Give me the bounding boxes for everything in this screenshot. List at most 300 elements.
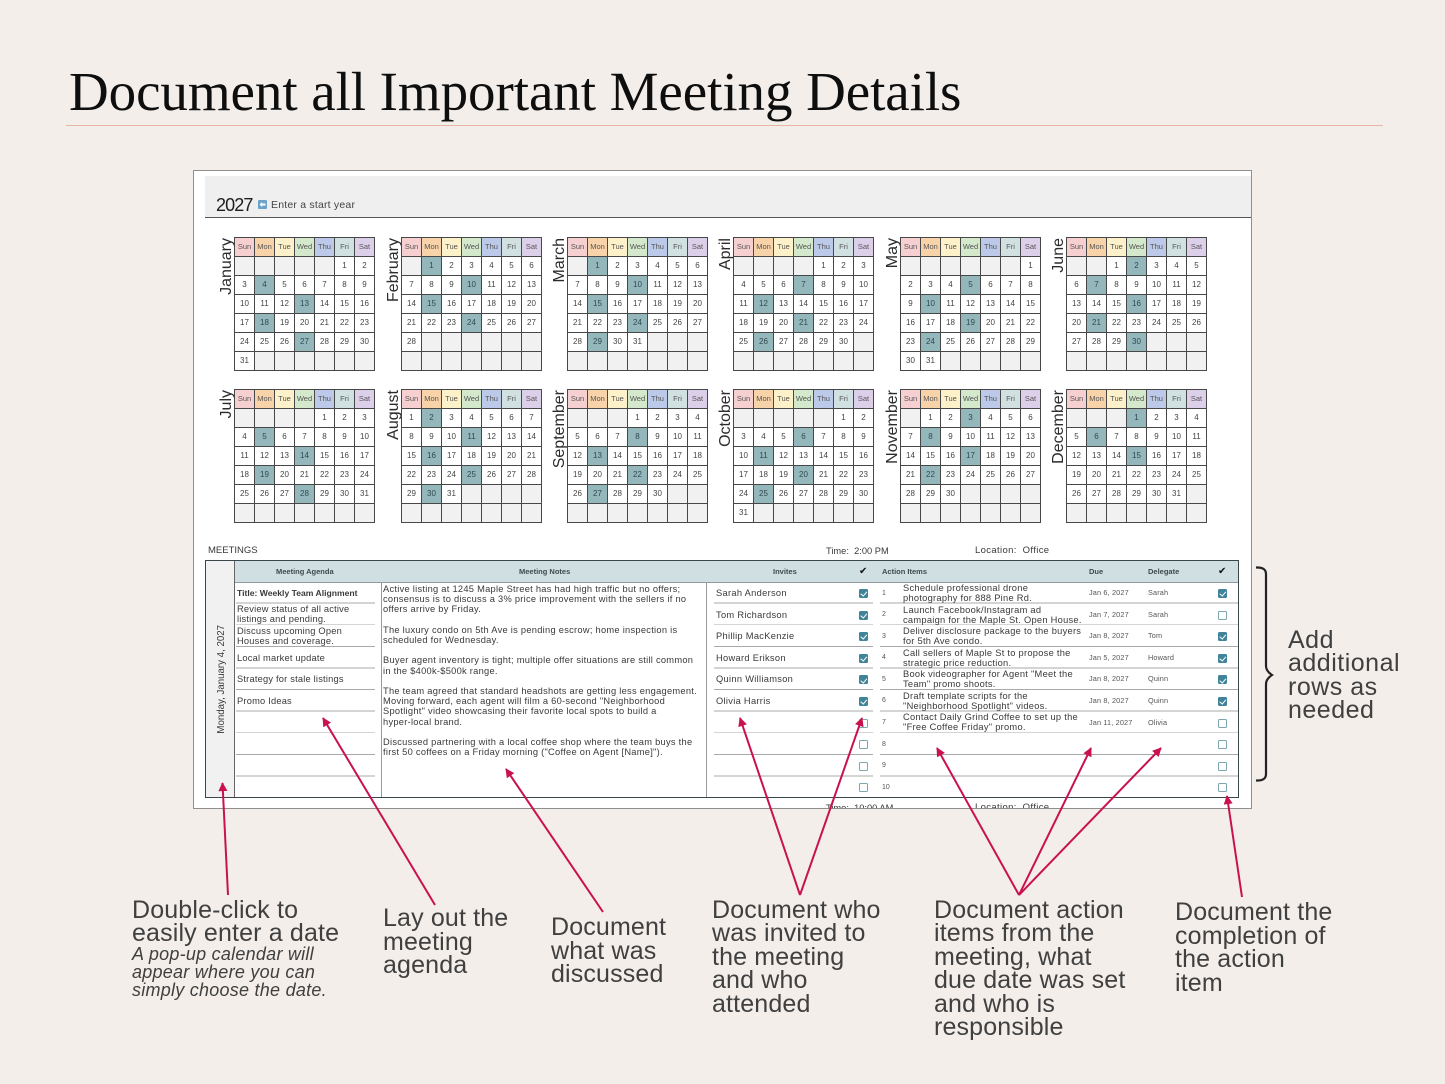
day grid: 16: [946, 451, 955, 460]
arrow: agenda: [323, 718, 435, 905]
day grid: [234, 389, 375, 523]
day grid: [900, 237, 1041, 371]
day grid: 16: [839, 299, 848, 308]
day grid: Wed: [297, 242, 312, 251]
day grid: 16: [1152, 451, 1161, 460]
day grid: 13: [593, 451, 602, 460]
day grid: 14: [573, 299, 582, 308]
day grid: Sat: [1025, 242, 1036, 251]
day grid: 1: [841, 413, 846, 422]
day grid: 31: [739, 508, 748, 517]
due dates: Jan 11, 2027: [1089, 718, 1132, 727]
day grid: 17: [926, 318, 935, 327]
day grid: 14: [1112, 451, 1121, 460]
day grid: Thu: [984, 242, 997, 251]
day grid: 11: [653, 280, 662, 289]
day grid: 23: [1152, 470, 1161, 479]
day grid: Sat: [359, 242, 370, 251]
day grid: 11: [467, 432, 476, 441]
day grid: 7: [821, 432, 826, 441]
day grid: 9: [449, 280, 454, 289]
day grid: 17: [1152, 299, 1161, 308]
day grid: 4: [242, 432, 247, 441]
day grid: 20: [593, 470, 602, 479]
day grid: 6: [595, 432, 600, 441]
day grid: Tue: [611, 394, 624, 403]
day grid: 27: [527, 318, 536, 327]
day grid: 28: [799, 337, 808, 346]
day grid: Sat: [692, 242, 703, 251]
day grid: 2: [948, 413, 953, 422]
action item 1: [903, 583, 1032, 603]
day grid: Wed: [1129, 242, 1144, 251]
day grid: 23: [360, 318, 369, 327]
day grid: 17: [859, 299, 868, 308]
month label: June: [1050, 238, 1066, 273]
day grid: 24: [926, 337, 935, 346]
day grid: 5: [262, 432, 267, 441]
day grid: 12: [966, 299, 975, 308]
brace: additional rows: [1256, 567, 1272, 781]
day grid: Tue: [944, 242, 957, 251]
day grid: 9: [1154, 432, 1159, 441]
day grid: Thu: [1150, 394, 1163, 403]
callout: completion: item: [1175, 969, 1223, 997]
callout: action items: due date was set: [934, 966, 1125, 994]
action checkboxes: [1218, 589, 1227, 792]
day grid: 24: [1172, 470, 1181, 479]
day grid: 6: [302, 280, 307, 289]
meeting notes: scheduled for Wednesday.: [383, 635, 499, 645]
header: invites check: ✔: [859, 566, 867, 576]
day grid: 18: [693, 451, 702, 460]
action item numbers: 8: [882, 741, 886, 748]
date column: [206, 561, 235, 797]
day grid: 16: [613, 299, 622, 308]
day grid: 30: [427, 489, 436, 498]
day grid: 26: [779, 489, 788, 498]
day grid: [401, 237, 542, 371]
day grid: 9: [429, 432, 434, 441]
day grid: 7: [575, 280, 580, 289]
action item numbers: 10: [882, 784, 890, 791]
day grid: 10: [926, 299, 935, 308]
meeting notes: offers arrive by Friday.: [383, 604, 481, 614]
day grid: 28: [573, 337, 582, 346]
day grid: 1: [1028, 261, 1033, 270]
day grid: 13: [1072, 299, 1081, 308]
day grid: 22: [407, 470, 416, 479]
day grid: 2: [429, 413, 434, 422]
day grid: 29: [633, 489, 642, 498]
action item 7: [903, 712, 1078, 732]
day grid: 31: [1172, 489, 1181, 498]
day grid: 13: [1092, 451, 1101, 460]
day grid: 3: [469, 261, 474, 270]
day grid: Wed: [796, 394, 811, 403]
day grid: 19: [280, 318, 289, 327]
day grid: 15: [633, 451, 642, 460]
day grid: 5: [781, 432, 786, 441]
day grid: 12: [673, 280, 682, 289]
day grid: Sun: [238, 394, 251, 403]
day grid: 20: [300, 318, 309, 327]
day grid: Thu: [318, 394, 331, 403]
due dates: Jan 6, 2027: [1089, 588, 1129, 597]
day grid: 26: [280, 337, 289, 346]
day grid: 8: [635, 432, 640, 441]
invite names: Sarah Anderson: [716, 588, 787, 598]
day grid: 16: [653, 451, 662, 460]
action item numbers: 5: [882, 676, 886, 683]
day grid: 28: [1092, 337, 1101, 346]
day grid: 26: [673, 318, 682, 327]
day grid: 4: [655, 261, 660, 270]
due dates: Jan 5, 2027: [1089, 653, 1129, 662]
day grid: 15: [427, 299, 436, 308]
day grid: 18: [260, 318, 269, 327]
day grid: [1066, 237, 1207, 371]
calendar: June: [1050, 237, 1207, 371]
day grid: 23: [653, 470, 662, 479]
agenda items: listings and pending.: [237, 614, 326, 624]
action item 6: [903, 691, 1047, 711]
callout: invites: Document who: [712, 896, 881, 924]
day grid: 2: [861, 413, 866, 422]
day grid: 18: [653, 299, 662, 308]
calendar: September: [550, 389, 708, 523]
day grid: Wed: [297, 394, 312, 403]
callout: invites: the meeting: [712, 943, 844, 971]
day grid: 13: [300, 299, 309, 308]
meeting table: [205, 560, 1239, 798]
day grid: 30: [839, 337, 848, 346]
action item 4: [903, 648, 1071, 668]
meeting location: Location: Office: [975, 545, 1049, 556]
day grid: 5: [1194, 261, 1199, 270]
day grid: 12: [507, 280, 516, 289]
day grid: 22: [819, 318, 828, 327]
callout: additional rows: additional: [1288, 649, 1400, 677]
day grid: 8: [595, 280, 600, 289]
day grid: 29: [340, 337, 349, 346]
day grid: [567, 389, 708, 523]
day grid: 10: [467, 280, 476, 289]
day grid: 6: [1094, 432, 1099, 441]
day grid: 23: [859, 470, 868, 479]
day grid: 8: [928, 432, 933, 441]
month label: July: [218, 390, 234, 418]
day grid: 25: [693, 470, 702, 479]
day grid: 17: [633, 299, 642, 308]
day grid: 8: [1028, 280, 1033, 289]
day grid: 10: [859, 280, 868, 289]
month label: August: [384, 390, 402, 440]
callout: agenda: Lay out the: [383, 904, 508, 932]
day grid: Fri: [1006, 242, 1015, 251]
day grid: 8: [342, 280, 347, 289]
day grid: 10: [1172, 432, 1181, 441]
day grid: 30: [360, 337, 369, 346]
title underline: [66, 125, 1383, 126]
arrow: notes: [506, 769, 603, 912]
day grid: 15: [1112, 299, 1121, 308]
header: Invites: Invites: [773, 567, 797, 576]
invite names: Olivia Harris: [716, 696, 771, 706]
day grid: 16: [360, 299, 369, 308]
day grid: 1: [429, 261, 434, 270]
action item numbers: 3: [882, 633, 886, 640]
header: Due: Due: [1089, 567, 1103, 576]
day grid: 29: [839, 489, 848, 498]
day grid: Thu: [318, 242, 331, 251]
day grid: 5: [1074, 432, 1079, 441]
day grid: 1: [821, 261, 826, 270]
day grid: Tue: [944, 394, 957, 403]
day grid: 21: [1112, 470, 1121, 479]
day grid: 5: [509, 261, 514, 270]
day grid: 25: [759, 489, 768, 498]
day grid: 12: [487, 432, 496, 441]
day grid: Mon: [424, 242, 439, 251]
day grid: 26: [507, 318, 516, 327]
day grid: 12: [573, 451, 582, 460]
day grid: Fri: [1006, 394, 1015, 403]
day grid: 9: [948, 432, 953, 441]
day grid: 22: [839, 470, 848, 479]
day grid: 25: [986, 470, 995, 479]
day grid: 19: [779, 470, 788, 479]
day grid: 12: [779, 451, 788, 460]
day grid: 22: [1026, 318, 1035, 327]
day grid: 29: [407, 489, 416, 498]
day grid: 24: [673, 470, 682, 479]
agenda item: Strategy for stale listings: [237, 674, 344, 684]
day grid: 27: [1092, 489, 1101, 498]
day grid: 7: [409, 280, 414, 289]
day grid: 18: [467, 451, 476, 460]
day grid: 16: [340, 451, 349, 460]
day grid: Sat: [858, 242, 869, 251]
day grid: 27: [1072, 337, 1081, 346]
action item 2: campaign for the Maple St. Open House.: [903, 615, 1082, 625]
arrow: date column: [222, 783, 228, 895]
day grid: 11: [487, 280, 496, 289]
header: Meeting Notes: Meeting Notes: [519, 567, 570, 576]
day grid: 12: [1192, 280, 1201, 289]
day grid: 9: [615, 280, 620, 289]
day grid: Mon: [590, 394, 605, 403]
day grid: 20: [799, 470, 808, 479]
day grid: Thu: [651, 394, 664, 403]
day grid: Sun: [405, 242, 418, 251]
day grid: 19: [1072, 470, 1081, 479]
meetings heading: MEETINGS: [208, 545, 258, 556]
day grid: 4: [761, 432, 766, 441]
day grid: Thu: [651, 242, 664, 251]
day grid: Sat: [526, 242, 537, 251]
day grid: 3: [675, 413, 680, 422]
action item 2: Launch Facebook/Instagram ad: [903, 604, 1041, 614]
day grid: 1: [1114, 261, 1119, 270]
day grid: 6: [695, 261, 700, 270]
day grid: 31: [360, 489, 369, 498]
day grid: Mon: [257, 242, 272, 251]
day grid: 5: [575, 432, 580, 441]
day grid: 15: [407, 451, 416, 460]
day grid: 2: [615, 261, 620, 270]
invite names: Howard Erikson: [716, 653, 786, 663]
year value: 2027: [216, 195, 252, 215]
day grid: Tue: [777, 394, 790, 403]
callout: completion: completion of: [1175, 922, 1326, 950]
day grid: 21: [320, 318, 329, 327]
day grid: 7: [529, 413, 534, 422]
day grid: 20: [986, 318, 995, 327]
day grid: Thu: [984, 394, 997, 403]
action item 4: Call sellers of Maple St to propose the: [903, 648, 1071, 658]
day grid: Tue: [278, 394, 291, 403]
day grid: Wed: [630, 242, 645, 251]
day grid: [1066, 389, 1207, 523]
day grid: 15: [839, 451, 848, 460]
callout: notes: discussed: [551, 960, 664, 988]
day grid: Sun: [904, 394, 917, 403]
day grid: Tue: [1110, 242, 1123, 251]
day grid: 18: [240, 470, 249, 479]
day grid: 11: [759, 451, 768, 460]
callout: date sub-note: appear where you can: [132, 962, 315, 982]
day grid: 20: [1092, 470, 1101, 479]
day grid: 4: [262, 280, 267, 289]
calendar: November: [884, 389, 1041, 523]
day grid: 3: [362, 413, 367, 422]
day grid: 31: [447, 489, 456, 498]
day grid: 28: [1006, 337, 1015, 346]
day grid: 27: [593, 489, 602, 498]
day grid: 22: [1132, 470, 1141, 479]
callout: invites: and who: [712, 966, 808, 994]
day grid: 15: [1132, 451, 1141, 460]
day grid: 18: [487, 299, 496, 308]
day grid: 17: [240, 318, 249, 327]
meeting notes: Active listing at 1245 Maple Street has had high traffic but no offers;: [383, 584, 680, 594]
day grid: Tue: [1110, 394, 1123, 403]
header: action check: ✔: [1218, 566, 1226, 576]
day grid: 27: [799, 489, 808, 498]
day grid: 21: [906, 470, 915, 479]
day grid: Wed: [963, 394, 978, 403]
day grid: 1: [342, 261, 347, 270]
day grid: Thu: [817, 242, 830, 251]
day grid: 11: [739, 299, 748, 308]
day grid: 4: [988, 413, 993, 422]
day grid: 24: [1152, 318, 1161, 327]
day grid: 14: [613, 451, 622, 460]
day grid: Fri: [1172, 394, 1181, 403]
day grid: 23: [427, 470, 436, 479]
day grid: 9: [362, 280, 367, 289]
day grid: 26: [1072, 489, 1081, 498]
callout: completion: [1175, 898, 1332, 997]
day grid: 7: [302, 432, 307, 441]
day grid: Wed: [464, 242, 479, 251]
day grid: [234, 237, 375, 371]
day grid: Sat: [1025, 394, 1036, 403]
callout: agenda: agenda: [383, 951, 467, 979]
meeting notes: Discussed partnering with a local coffee shop where the team buys the: [383, 737, 692, 747]
day grid: 23: [340, 470, 349, 479]
day grid: Sat: [692, 394, 703, 403]
day grid: 22: [633, 470, 642, 479]
day grid: Sun: [737, 242, 750, 251]
month label: January: [218, 238, 234, 295]
day grid: [401, 389, 542, 523]
day grid: 28: [819, 489, 828, 498]
day grid: 17: [739, 470, 748, 479]
day grid: 19: [507, 299, 516, 308]
callout: notes: Document: [551, 913, 666, 941]
day grid: 18: [1172, 299, 1181, 308]
callout: notes: what was: [551, 937, 656, 965]
day grid: 15: [1026, 299, 1035, 308]
day grid: 30: [653, 489, 662, 498]
day grid: 28: [613, 489, 622, 498]
day grid: Wed: [796, 242, 811, 251]
action item 1: Schedule professional drone: [903, 583, 1028, 593]
day grid: 24: [633, 318, 642, 327]
day grid: 25: [240, 489, 249, 498]
due dates: Jan 8, 2027: [1089, 696, 1129, 705]
day grid: Sun: [737, 394, 750, 403]
day grid: 19: [260, 470, 269, 479]
due dates: Jan 8, 2027: [1089, 631, 1129, 640]
delegates: Tom: [1148, 631, 1162, 640]
day grid: 12: [280, 299, 289, 308]
day grid: 20: [1026, 451, 1035, 460]
day grid: 17: [360, 451, 369, 460]
day grid: 20: [693, 299, 702, 308]
invite names: Quinn Williamson: [716, 674, 793, 684]
day grid: 27: [693, 318, 702, 327]
day grid: 26: [1192, 318, 1201, 327]
day grid: 6: [988, 280, 993, 289]
action item numbers: 9: [882, 762, 886, 769]
day grid: 15: [926, 451, 935, 460]
action item numbers: 2: [882, 611, 886, 618]
day grid: 8: [1134, 432, 1139, 441]
day grid: 24: [360, 470, 369, 479]
header: Action Items: Action Items: [882, 567, 927, 576]
day grid: 30: [946, 489, 955, 498]
day grid: 8: [1114, 280, 1119, 289]
day grid: 2: [1154, 413, 1159, 422]
day grid: 29: [1112, 337, 1121, 346]
day grid: [733, 237, 874, 371]
callout: completion: the action: [1175, 945, 1285, 973]
callout: action items: and who is: [934, 990, 1055, 1018]
day grid: 6: [1028, 413, 1033, 422]
day grid: 22: [340, 318, 349, 327]
day grid: 25: [1172, 318, 1181, 327]
day grid: 2: [449, 261, 454, 270]
day grid: 13: [799, 451, 808, 460]
day grid: 14: [799, 299, 808, 308]
agenda item: [237, 626, 342, 646]
delegates: Howard: [1148, 653, 1174, 662]
action item 3: Deliver disclosure package to the buyers: [903, 626, 1081, 636]
day grid: 30: [1152, 489, 1161, 498]
